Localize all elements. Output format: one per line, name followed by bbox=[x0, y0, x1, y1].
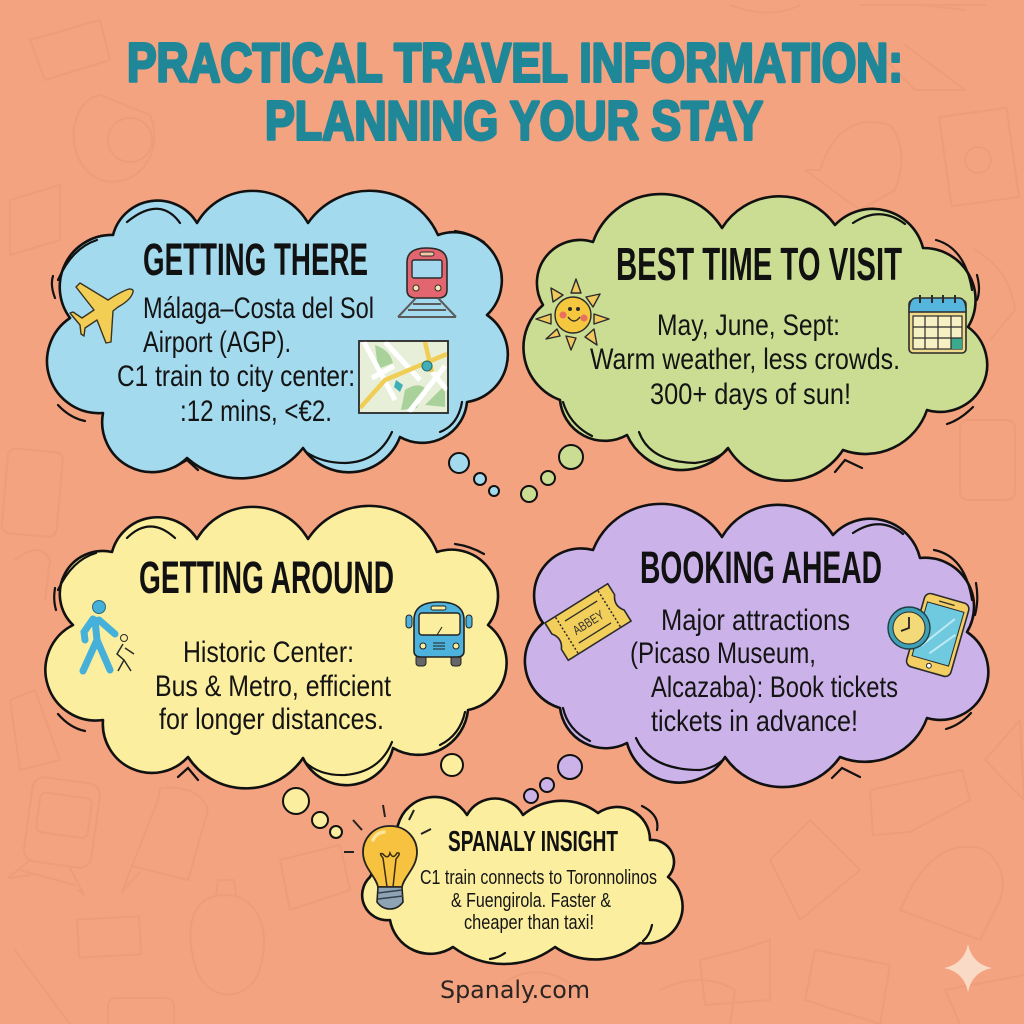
icon: ticket bbox=[545, 584, 631, 660]
body text: Warm weather, less crowds. bbox=[590, 343, 900, 376]
panel: booking ahead bbox=[524, 504, 988, 803]
website footer: Spanaly.com bbox=[440, 976, 590, 1004]
body text: Airport (AGP). bbox=[143, 326, 291, 359]
body text: Historic Center: bbox=[183, 636, 354, 669]
body text: tickets in advance! bbox=[651, 705, 858, 738]
heading: BOOKING AHEAD bbox=[640, 542, 882, 593]
cloud: green bbox=[523, 194, 987, 481]
panel: getting around bbox=[45, 506, 507, 788]
cloud highlight strokes bbox=[52, 209, 484, 470]
body text: Alcazaba): Book tickets bbox=[651, 671, 898, 704]
body text: :12 mins, <€2. bbox=[180, 395, 332, 428]
title bbox=[127, 32, 903, 152]
body text: Málaga–Costa del Sol bbox=[143, 292, 374, 325]
body text: & Fuengirola. Faster & bbox=[451, 889, 611, 912]
cloud: yellow bbox=[45, 506, 507, 788]
heading: GETTING AROUND bbox=[139, 552, 394, 603]
icon: train bbox=[398, 248, 456, 317]
icon: pedestrians bbox=[83, 600, 134, 671]
body text bbox=[590, 309, 900, 411]
cloud highlight strokes bbox=[490, 806, 657, 959]
thought bubbles bbox=[449, 453, 499, 496]
body text: (Picaso Museum, bbox=[630, 637, 816, 670]
icon: airplane bbox=[70, 283, 133, 343]
cloud: insight bbox=[362, 797, 683, 964]
body text: May, June, Sept: bbox=[657, 309, 840, 342]
icon: map bbox=[359, 341, 448, 413]
body text bbox=[630, 604, 898, 738]
cloud highlight strokes bbox=[563, 214, 979, 472]
body text bbox=[420, 866, 657, 934]
icon: calendar bbox=[909, 295, 966, 353]
body text bbox=[117, 292, 374, 428]
icon: sun bbox=[536, 279, 609, 350]
body text: C1 train to city center: bbox=[117, 360, 355, 393]
body text: Bus & Metro, efficient bbox=[155, 670, 392, 703]
cloud highlight strokes bbox=[563, 524, 977, 778]
thought bubble bbox=[441, 754, 463, 776]
panel: best time to visit bbox=[521, 194, 987, 502]
title: PLANNING YOUR STAY bbox=[265, 90, 763, 152]
body text: 300+ days of sun! bbox=[650, 378, 851, 411]
body text bbox=[155, 636, 392, 736]
cloud: blue bbox=[47, 191, 508, 478]
body text: for longer distances. bbox=[159, 703, 384, 736]
icon: ticket: ABBEY bbox=[570, 607, 607, 638]
heading: SPANALY INSIGHT bbox=[448, 826, 618, 858]
cloud highlight strokes bbox=[54, 526, 484, 780]
body text: C1 train connects to Toronnolinos bbox=[420, 866, 657, 889]
heading: GETTING THERE bbox=[143, 234, 368, 285]
icon: light bulb bbox=[344, 805, 431, 909]
panel: getting there bbox=[47, 191, 508, 496]
thought bubbles bbox=[283, 788, 342, 838]
cloud: purple bbox=[525, 504, 988, 787]
body text: cheaper than taxi! bbox=[464, 911, 594, 934]
panel: spanaly insight bbox=[283, 788, 683, 964]
icon: phone and clock bbox=[888, 592, 970, 678]
sparkle mark bbox=[944, 944, 992, 992]
body text: Major attractions bbox=[661, 604, 850, 637]
thought bubbles bbox=[524, 755, 582, 803]
thought bubbles bbox=[521, 445, 583, 502]
icon: bus bbox=[406, 602, 472, 666]
